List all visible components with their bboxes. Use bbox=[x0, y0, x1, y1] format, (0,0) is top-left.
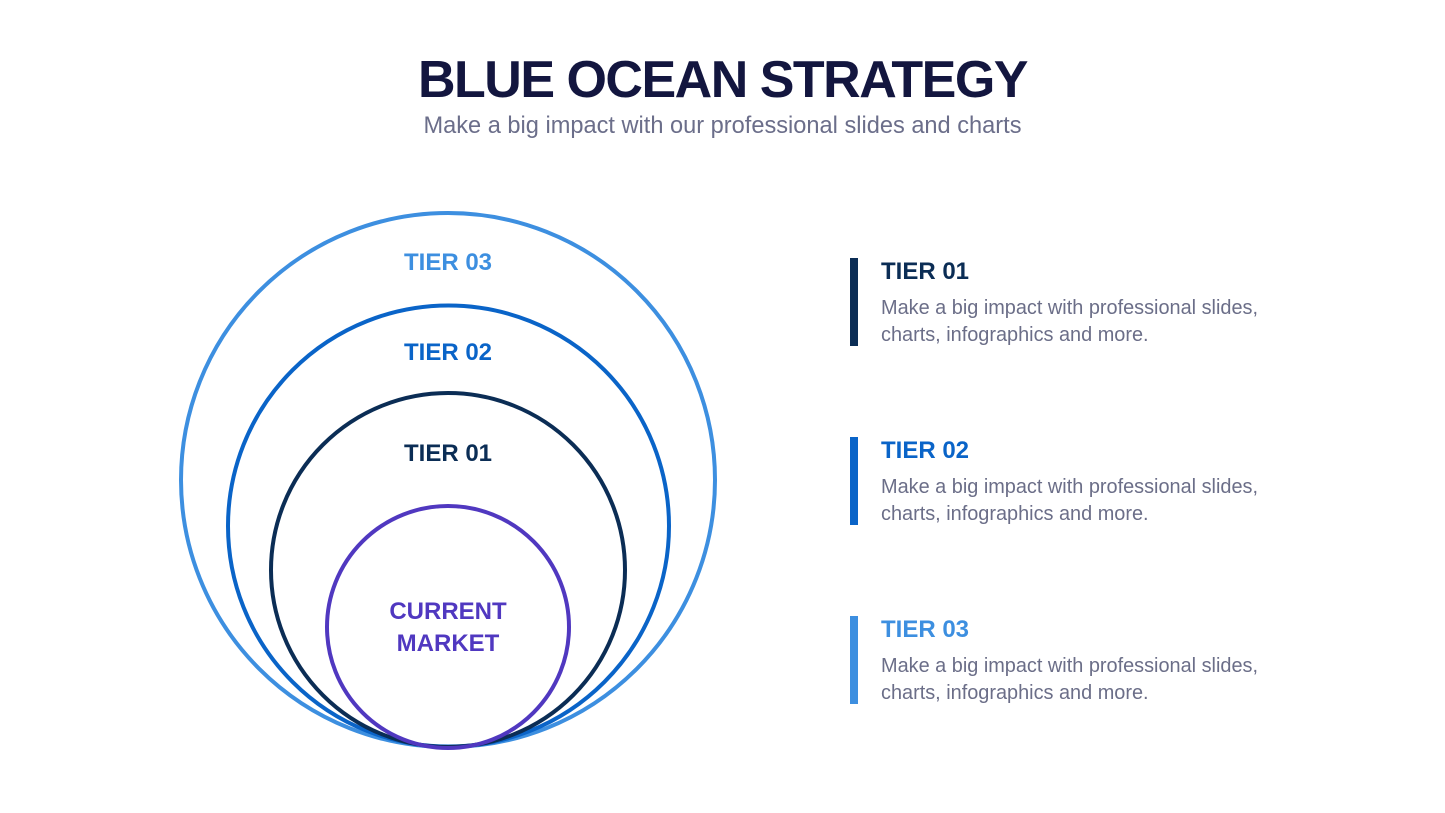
subtitle: Make a big impact with our professional slides and charts bbox=[423, 113, 1022, 139]
chart: nested circles bbox=[179, 211, 717, 750]
circle: tier 01 bbox=[271, 393, 625, 747]
item: tier 02 bbox=[850, 437, 1258, 525]
item: tier 01 bbox=[850, 258, 1258, 346]
item: tier 02: Make a big impact with professional slides, bbox=[881, 476, 1258, 498]
circle: tier 02: TIER 02 bbox=[404, 339, 492, 366]
item: tier 02: TIER 02 bbox=[881, 437, 969, 464]
item: tier 03: TIER 03 bbox=[881, 616, 969, 643]
circle: current market: MARKET bbox=[397, 630, 500, 657]
item: tier 02: charts, infographics and more. bbox=[881, 503, 1149, 525]
item: tier 01: charts, infographics and more. bbox=[881, 324, 1149, 346]
circle: tier 01: TIER 01 bbox=[404, 440, 492, 467]
title: BLUE OCEAN STRATEGY bbox=[418, 51, 1027, 109]
circle: tier 02 bbox=[228, 306, 669, 746]
item: tier 03: Make a big impact with professional slides, bbox=[881, 655, 1258, 677]
item: tier 01: Make a big impact with professional slides, bbox=[881, 297, 1258, 319]
item: tier 03: charts, infographics and more. bbox=[881, 682, 1149, 704]
circle: tier 03 bbox=[181, 213, 715, 747]
item: tier 03 bbox=[850, 616, 1258, 704]
circle: current market: CURRENT bbox=[389, 598, 507, 625]
item: tier 01: TIER 01 bbox=[881, 258, 969, 285]
circle: tier 03: TIER 03 bbox=[404, 249, 492, 276]
circle: current market bbox=[327, 506, 569, 748]
